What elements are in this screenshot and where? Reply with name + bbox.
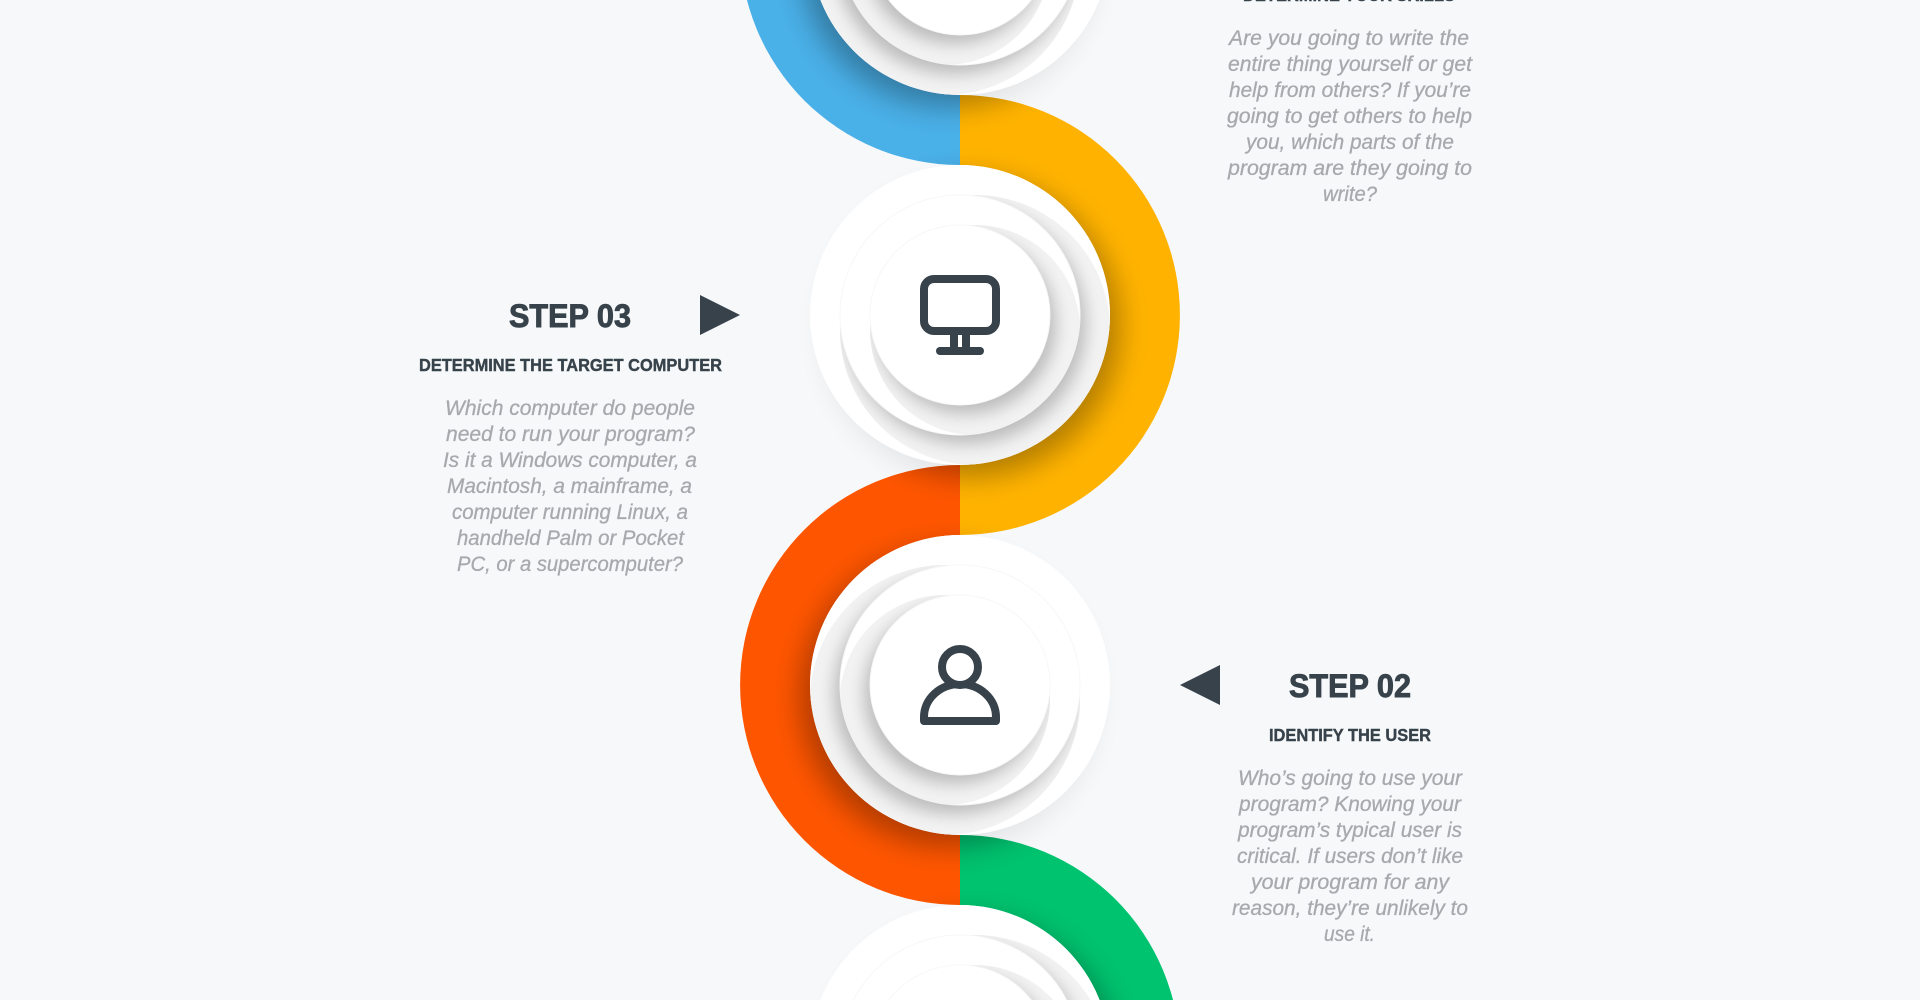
icon: monitor	[924, 279, 996, 351]
band: blue arc	[740, 0, 960, 165]
icon: user	[924, 649, 996, 721]
soft disc shadows on background	[798, 0, 1122, 1000]
text block: step 02	[1232, 668, 1468, 946]
body text: step 01: going to get others to help	[1227, 105, 1472, 128]
arrow: step 02 pointer	[1180, 665, 1220, 705]
disc: step 04 circle	[800, 895, 1120, 1000]
subheading: identify the user: IDENTIFY THE USER	[1269, 725, 1431, 745]
body text: step 02: your program for any	[1249, 871, 1451, 894]
body text: step 01: you, which parts of the	[1244, 131, 1454, 154]
disc shadows falling on bands	[800, 0, 1120, 1000]
body text: step 02: use it.	[1324, 923, 1375, 946]
band: yellow arc	[960, 95, 1180, 535]
body text: step 02: critical. If users don’t like	[1237, 845, 1463, 868]
text block: step 01	[1227, 0, 1473, 206]
heading: step 02: STEP 02	[1289, 668, 1411, 704]
body text: step 03: Macintosh, a mainframe, a	[447, 475, 692, 498]
disc: step 02 circle	[800, 525, 1120, 845]
body text: step 03: computer running Linux, a	[452, 501, 688, 524]
body text: step 03: Which computer do people	[445, 397, 695, 420]
body text: step 01: program are they going to	[1227, 157, 1472, 180]
disc: step 01 circle	[800, 0, 1120, 105]
body text: step 01: write?	[1323, 183, 1377, 206]
body text: step 02	[1232, 767, 1468, 946]
disc: step 03 circle	[800, 155, 1120, 475]
band: green arc	[960, 835, 1180, 1000]
body text: step 02: program’s typical user is	[1237, 819, 1462, 842]
body text: step 03	[443, 397, 697, 576]
body text: step 02: Who’s going to use your	[1238, 767, 1463, 790]
body text: step 03: PC, or a supercomputer?	[457, 553, 683, 576]
text block: step 03	[419, 298, 722, 576]
body text: step 03: Is it a Windows computer, a	[443, 449, 697, 472]
body text: step 02: program? Knowing your	[1238, 793, 1462, 816]
body text: step 03: need to run your program?	[446, 423, 695, 446]
body text: step 01: Are you going to write the	[1227, 27, 1469, 50]
body text: step 03: handheld Palm or Pocket	[457, 527, 685, 550]
arrow: step 03 pointer	[700, 295, 740, 335]
body text: step 01	[1227, 27, 1473, 206]
body text: step 01: entire thing yourself or get	[1228, 53, 1473, 76]
band: orange arc	[740, 465, 960, 905]
body text: step 01: help from others? If you’re	[1229, 79, 1471, 102]
subheading: determine the target computer: DETERMINE THE TARGET COMPUTER	[419, 355, 722, 375]
body text: step 02: reason, they’re unlikely to	[1232, 897, 1468, 920]
heading: step 03: STEP 03	[509, 298, 631, 334]
